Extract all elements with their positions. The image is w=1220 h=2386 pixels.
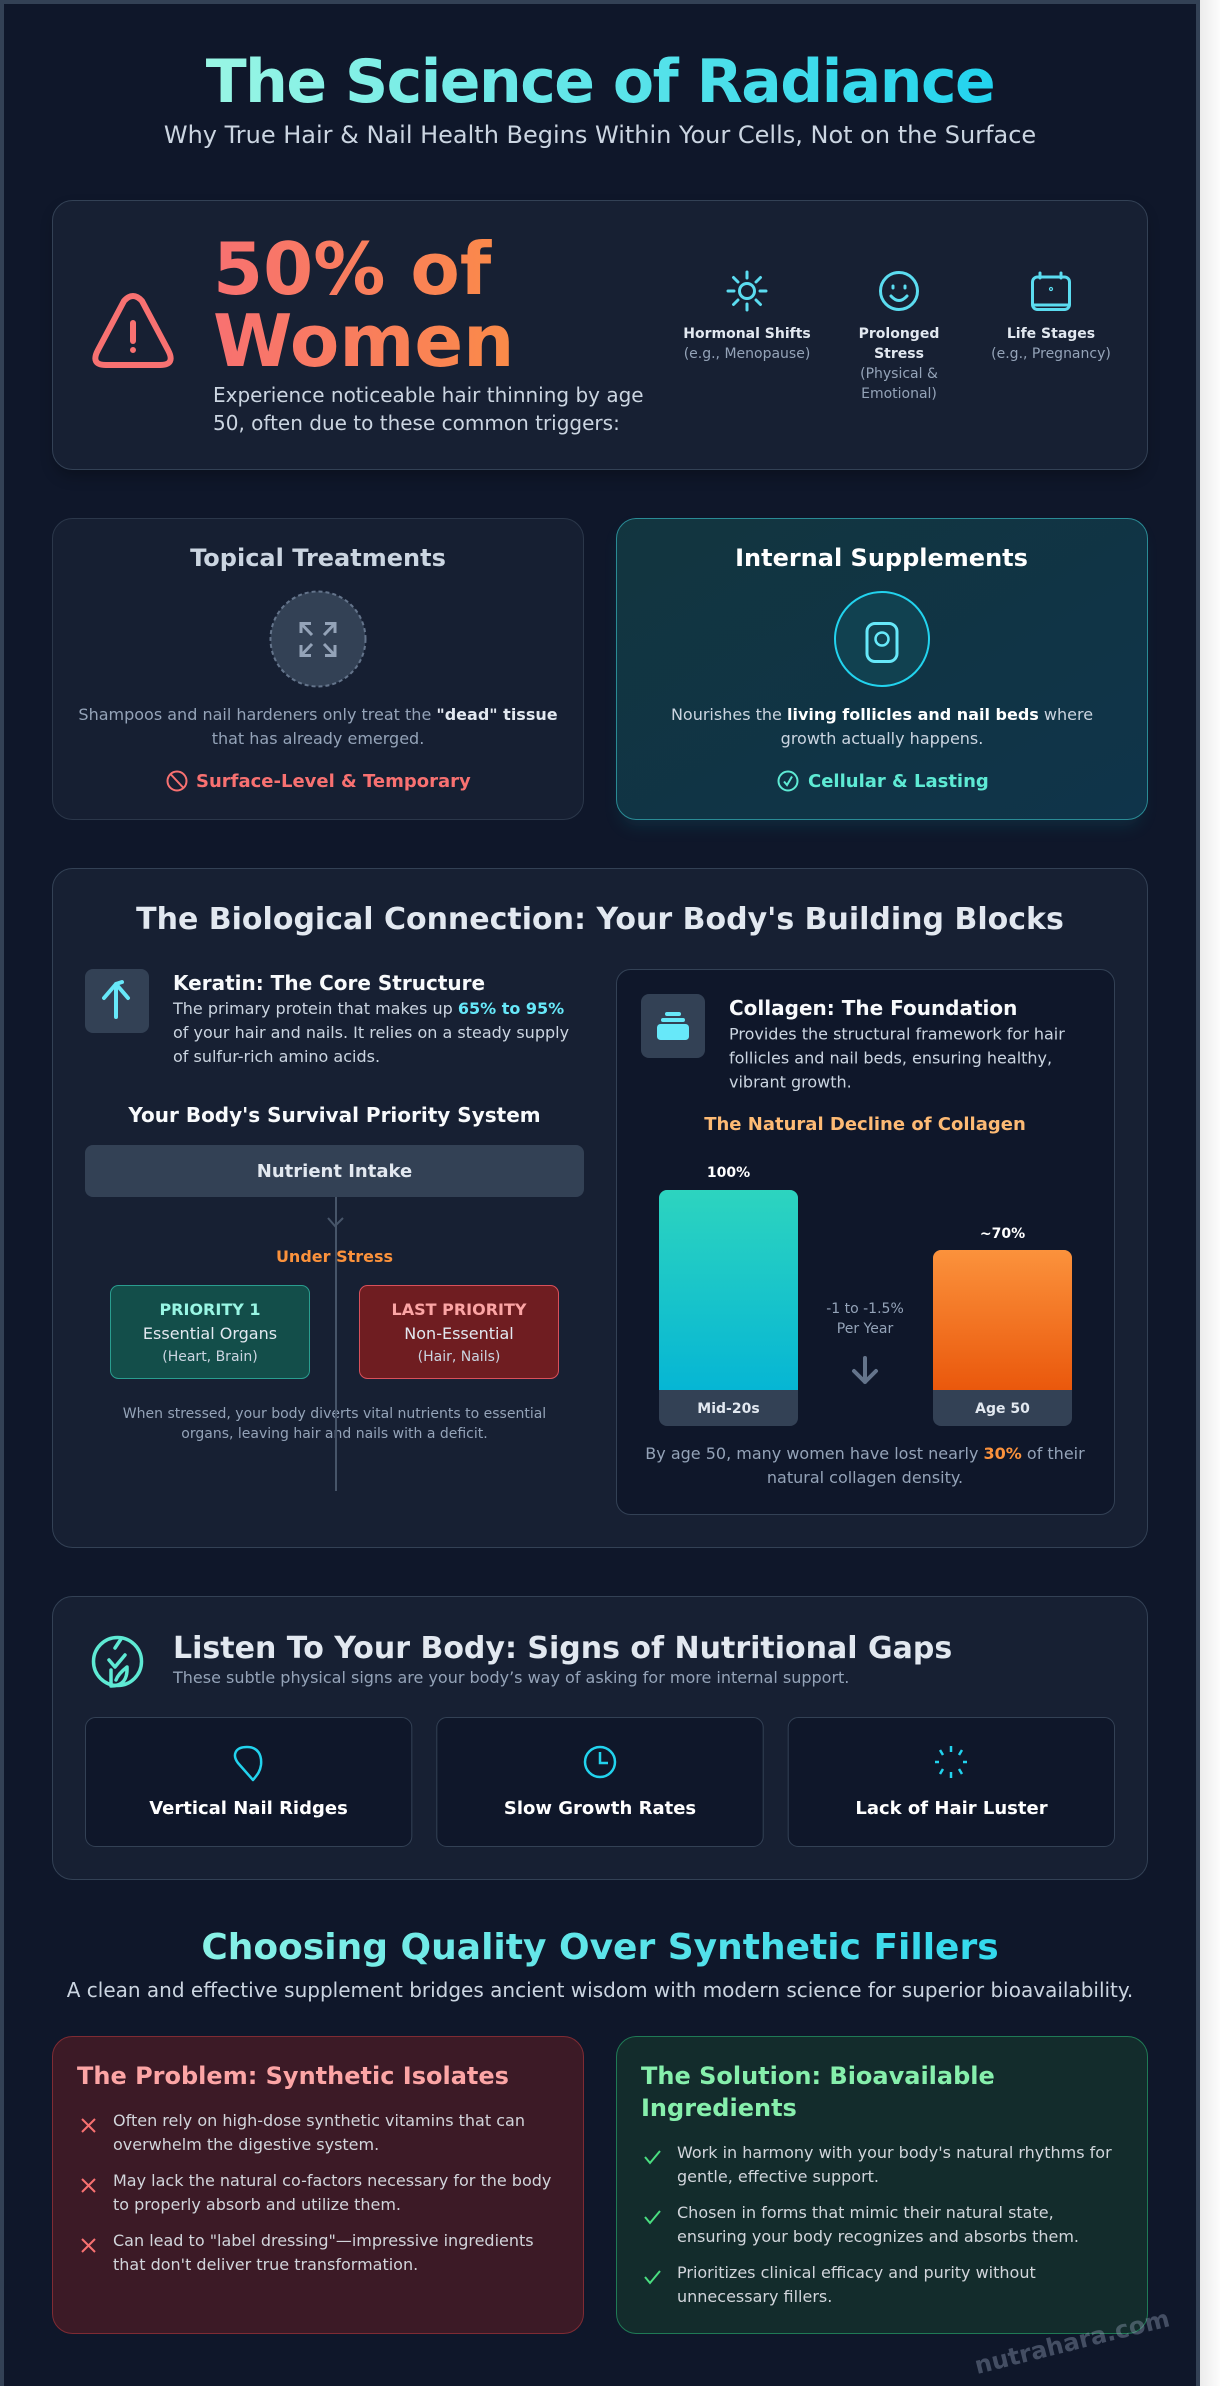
- stress note: When stressed, your body diverts vital nutrients to essential: [123, 1406, 546, 1422]
- nutrient intake box: Nutrient Intake: [257, 1161, 412, 1182]
- item 1: overwhelm the digestive system.: [113, 2135, 379, 2154]
- collagen description: follicles and nail beds, ensuring healthy,: [729, 1048, 1052, 1068]
- description: growth actually happens.: [781, 729, 983, 748]
- collagen heading: Collagen: The Foundation: [729, 996, 1017, 1020]
- trigger: prolonged stress: Prolonged: [859, 326, 939, 342]
- item 3: Prioritizes clinical efficacy and purity without: [677, 2263, 1036, 2282]
- heading: Topical Treatments: [190, 544, 446, 572]
- last priority box: (Hair, Nails): [418, 1349, 500, 1365]
- item 2: [645, 2203, 1079, 2246]
- trigger: prolonged stress: Emotional): [861, 386, 937, 402]
- trigger: prolonged stress: [859, 326, 939, 402]
- priority 1 box: Essential Organs: [143, 1324, 277, 1343]
- problem list: [82, 2111, 551, 2274]
- icon: prohibited: [168, 772, 186, 790]
- last priority box: LAST PRIORITY: [392, 1300, 527, 1319]
- trigger: hormonal shifts: [683, 326, 811, 362]
- bar: age 50: Age 50: [975, 1401, 1030, 1417]
- decline rate annotation: [826, 1301, 904, 1382]
- item 1: gentle, effective support.: [677, 2167, 879, 2186]
- watermark: nutrahara.com: [972, 2304, 1172, 2380]
- description: Shampoos and nail hardeners only treat the "dead" tissue: [78, 705, 558, 724]
- problem heading: The Problem: Synthetic Isolates: [77, 2062, 509, 2090]
- nutrient intake box: [85, 1145, 584, 1197]
- priority 1 box: [110, 1286, 310, 1378]
- card: vertical nail ridges: [86, 1718, 412, 1846]
- chart heading: The Natural Decline of Collagen: [704, 1114, 1026, 1135]
- icon: face: [880, 272, 918, 310]
- last priority box: Non-Essential: [404, 1324, 514, 1343]
- page side margin: [1200, 0, 1220, 2386]
- icon: sun: [728, 272, 766, 310]
- item 1: Often rely on high-dose synthetic vitamins that can: [113, 2111, 525, 2130]
- bar: mid-20s: [659, 1165, 798, 1426]
- description: that has already emerged.: [212, 729, 424, 748]
- headline statistic: 50% of: [213, 227, 492, 311]
- headline statistic: Women: [213, 299, 514, 383]
- collagen description: Provides the structural framework for hair: [729, 1024, 1065, 1044]
- icon: checks in circle: [94, 1638, 142, 1686]
- panel: signs of nutritional gaps: [52, 1596, 1148, 1880]
- title: The Science of Radiance: [206, 47, 994, 117]
- icon: check circle: [778, 772, 798, 790]
- item 2: ensuring your body recognizes and absorbs them.: [677, 2227, 1079, 2246]
- solution list: [645, 2143, 1112, 2306]
- panel: the solution: [616, 2036, 1148, 2334]
- collagen description: vibrant growth.: [729, 1072, 852, 1092]
- item 1: Work in harmony with your body's natural rhythms for: [677, 2143, 1112, 2162]
- keratin description: of your hair and nails. It relies on a steady supply: [173, 1023, 569, 1042]
- keratin description: The primary protein that makes up 65% to 95%: [173, 999, 564, 1018]
- trigger: life stages: [991, 326, 1111, 362]
- item 3: that don't deliver true transformation.: [113, 2255, 418, 2274]
- panel: topical treatments: [52, 518, 584, 820]
- priority 1 box: PRIORITY 1: [159, 1300, 261, 1319]
- bar: age 50: [933, 1226, 1072, 1426]
- item 3: [645, 2263, 1036, 2306]
- panel: internal supplements: [616, 518, 1148, 826]
- section heading: quality: Choosing Quality Over Synthetic Fillers: [201, 1927, 999, 1968]
- card: slow growth rates: Slow Growth Rates: [504, 1798, 696, 1819]
- card: lack of hair luster: [788, 1718, 1114, 1846]
- keratin description: of sulfur-rich amino acids.: [173, 1047, 380, 1066]
- panel: collagen card: [616, 970, 1114, 1514]
- bar: mid-20s: Mid-20s: [697, 1401, 760, 1417]
- item 2: Chosen in forms that mimic their natural state,: [677, 2203, 1054, 2222]
- arrow: flow line: [328, 1197, 343, 1491]
- item 3: [82, 2231, 534, 2274]
- trigger: hormonal shifts: (e.g., Menopause): [684, 346, 810, 362]
- icon: keratin arrow: [85, 969, 149, 1033]
- bar: age 50: ~70%: [980, 1226, 1025, 1242]
- bar: mid-20s: 100%: [707, 1165, 750, 1181]
- solution heading: Ingredients: [641, 2094, 797, 2122]
- description: Nourishes the living follicles and nail beds where: [671, 705, 1093, 724]
- keratin heading: Keratin: The Core Structure: [173, 971, 485, 995]
- icon: expand arrows in dashed circle: [270, 592, 366, 686]
- item 1: [645, 2143, 1112, 2186]
- trigger: prolonged stress: (Physical &: [860, 366, 938, 382]
- card: slow growth rates: [437, 1718, 763, 1846]
- item 1: [82, 2111, 525, 2154]
- icon: calendar: [1032, 273, 1070, 310]
- collagen note: natural collagen density.: [767, 1468, 963, 1487]
- last priority box: [360, 1286, 558, 1378]
- item 3: unnecessary fillers.: [677, 2287, 832, 2306]
- decline rate annotation: -1 to -1.5%: [826, 1301, 904, 1317]
- stress note: organs, leaving hair and nails with a deficit.: [181, 1426, 488, 1442]
- solution heading: The Solution: Bioavailable: [641, 2062, 995, 2090]
- subheading: These subtle physical signs are your body’s way of asking for more internal support.: [172, 1668, 849, 1687]
- item 2: [82, 2171, 551, 2214]
- heading: Internal Supplements: [735, 544, 1028, 572]
- item 2: to properly absorb and utilize them.: [113, 2195, 401, 2214]
- label: surface-level: Surface-Level & Temporary: [196, 771, 471, 792]
- panel: the problem: [52, 2036, 584, 2334]
- item 2: May lack the natural co-factors necessary for the body: [113, 2171, 551, 2190]
- trigger: life stages: Life Stages: [1007, 326, 1095, 342]
- heading: Listen To Your Body: Signs of Nutritional Gaps: [173, 1631, 952, 1666]
- icon: collagen jar: [641, 994, 705, 1058]
- trigger: life stages: (e.g., Pregnancy): [991, 346, 1111, 362]
- card: vertical nail ridges: Vertical Nail Ridges: [149, 1798, 348, 1819]
- priority 1 box: (Heart, Brain): [162, 1349, 258, 1365]
- panel: 50% of women statistic: [52, 200, 1148, 475]
- subtitle: Why True Hair & Nail Health Begins Within Your Cells, Not on the Surface: [164, 121, 1036, 149]
- item 3: Can lead to "label dressing"—impressive ingredients: [113, 2231, 534, 2250]
- under stress label: Under Stress: [276, 1247, 393, 1266]
- collagen note: By age 50, many women have lost nearly 30% of their: [645, 1444, 1085, 1463]
- bar chart: collagen decline: [659, 1165, 1072, 1426]
- icon: warning triangle: [95, 296, 171, 365]
- label: cellular: Cellular & Lasting: [808, 771, 989, 792]
- statistic description: Experience noticeable hair thinning by age: [213, 383, 644, 407]
- card: lack of hair luster: Lack of Hair Luster: [855, 1798, 1048, 1819]
- statistic description: 50, often due to these common triggers:: [213, 411, 620, 435]
- survival priority heading: Your Body's Survival Priority System: [127, 1103, 541, 1127]
- trigger: prolonged stress: Stress: [874, 346, 924, 362]
- section subheading: A clean and effective supplement bridges ancient wisdom with modern science for superior bioavailability.: [67, 1978, 1133, 2002]
- heading: The Biological Connection: Your Body's Building Blocks: [136, 902, 1064, 937]
- icon: capsule in circle: [835, 592, 929, 686]
- panel: biological connection: [52, 868, 1148, 1548]
- decline rate annotation: Per Year: [837, 1321, 893, 1337]
- trigger: hormonal shifts: Hormonal Shifts: [683, 326, 811, 342]
